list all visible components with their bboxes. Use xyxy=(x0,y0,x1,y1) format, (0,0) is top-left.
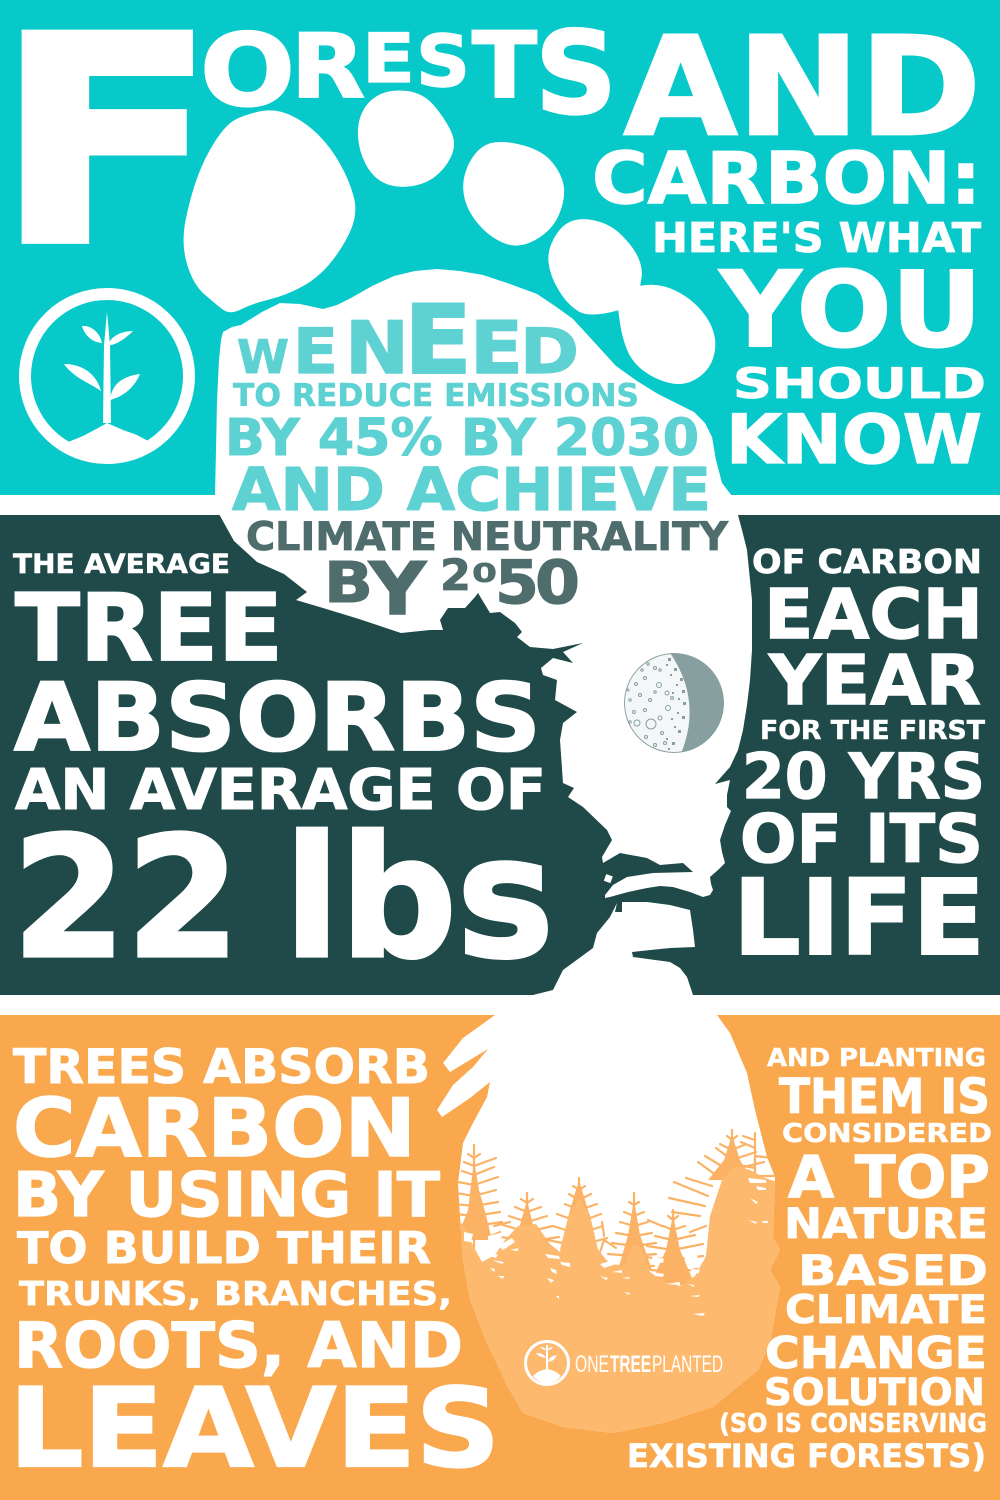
22: 22 xyxy=(12,802,240,996)
footprint: big toe xyxy=(185,111,354,311)
moon: shadow side xyxy=(624,653,724,753)
lbs: lbs xyxy=(284,800,554,996)
to build their: TO BUILD THEIR xyxy=(17,1223,431,1274)
panel: teal header band xyxy=(0,0,1000,495)
carbon: CARBON xyxy=(13,1082,416,1175)
fir tree branches xyxy=(454,1130,777,1285)
the average: THE AVERAGE xyxy=(13,549,230,580)
title: O: O xyxy=(200,12,295,129)
logo wordmark PLANTED: PLANTED xyxy=(652,1351,723,1378)
2: 2 xyxy=(440,551,471,601)
heading: Forests and carbon, here's what you should know xyxy=(0,0,986,480)
logo mound xyxy=(68,423,147,452)
text block: of carbon each year for the first 20 yrs of its life xyxy=(733,542,986,979)
climate: CLIMATE xyxy=(785,1288,987,1333)
D: D xyxy=(520,315,579,388)
leaves: LEAVES xyxy=(9,1365,500,1492)
E: E xyxy=(293,315,338,388)
year: YEAR xyxy=(768,641,981,721)
title: S: S xyxy=(535,7,617,140)
illustration: forest inside the heel xyxy=(458,1128,780,1433)
solution: SOLUTION xyxy=(764,1371,985,1414)
logo leaves xyxy=(64,326,140,400)
footprint: heel in orange band xyxy=(437,1015,780,1433)
W: W xyxy=(237,330,289,384)
title: S: S xyxy=(416,20,470,103)
for the first: FOR THE FIRST xyxy=(760,716,986,746)
logo: One Tree Planted xyxy=(526,1342,723,1384)
title: SHOULD: SHOULD xyxy=(733,359,986,408)
based: BASED xyxy=(798,1246,988,1295)
0: 0 xyxy=(472,559,497,589)
logo wordmark ONE: ONE xyxy=(575,1351,609,1378)
title: HERE'S WHAT: HERE'S WHAT xyxy=(652,214,981,262)
title: YOU: YOU xyxy=(718,249,982,371)
footprint: small knot xyxy=(604,874,613,883)
and planting: AND PLANTING xyxy=(767,1043,986,1072)
white flecks in forest xyxy=(464,1178,768,1316)
footprint: fourth and fifth toes xyxy=(549,220,714,383)
E: E xyxy=(404,286,472,396)
of its: OF ITS xyxy=(740,800,983,878)
title: KNOW: KNOW xyxy=(726,401,982,480)
footprint: heel xyxy=(495,902,717,1015)
nature: NATURE xyxy=(784,1199,988,1248)
to reduce emissions: TO REDUCE EMISSIONS xyxy=(233,378,639,414)
so is conserving: (SO IS CONSERVING xyxy=(719,1409,987,1439)
logo ring xyxy=(526,1342,568,1384)
trunks, branches,: TRUNKS, BRANCHES, xyxy=(19,1274,452,1313)
text block: the average tree absorbs an average of 22 lbs xyxy=(12,549,554,996)
each: EACH xyxy=(764,575,983,655)
absorbs: ABSORBS xyxy=(14,664,541,773)
roots, and: ROOTS, AND xyxy=(14,1309,463,1382)
logo sprout xyxy=(533,1345,561,1383)
change: CHANGE xyxy=(765,1328,987,1379)
logo ring xyxy=(25,294,189,458)
icon: moon xyxy=(624,653,724,753)
text block: and planting them xyxy=(627,1043,992,1475)
footprint: sole, tree-canopy silhouette xyxy=(215,269,752,898)
an average of: AN AVERAGE OF xyxy=(15,758,546,823)
fir tree cores xyxy=(456,1135,752,1285)
moon: lit side with craters xyxy=(624,653,690,753)
logo wordmark TREE: TREE xyxy=(610,1351,651,1378)
them is: THEM IS xyxy=(779,1069,990,1125)
panel: dark green middle band xyxy=(0,515,1000,995)
tree: TREE xyxy=(15,574,283,682)
title: AND: AND xyxy=(624,9,981,167)
5: 5 xyxy=(495,548,539,618)
logo stem xyxy=(103,312,111,423)
0: 0 xyxy=(535,548,580,618)
panel: orange lower band xyxy=(0,1015,1000,1500)
climate neutrality: CLIMATE NEUTRALITY xyxy=(246,515,729,560)
icon: seedling logo xyxy=(25,294,189,470)
text block: we need to reduce emissions xyxy=(225,286,711,524)
B: B xyxy=(324,551,373,616)
forest floor mass xyxy=(460,1166,780,1433)
text block: climate neutrality by 2050 xyxy=(246,515,729,631)
by 45% by 2030: BY 45% BY 2030 xyxy=(225,409,699,468)
title: CARBON:: CARBON: xyxy=(592,137,981,220)
life: LIFE xyxy=(733,857,985,979)
footprint: second toe xyxy=(359,91,453,186)
footprint: third toe xyxy=(464,143,563,245)
moon: craters xyxy=(624,654,724,752)
and achieve: AND ACHIEVE xyxy=(232,456,711,524)
N: N xyxy=(345,306,409,390)
Y: Y xyxy=(368,547,427,631)
title: R: R xyxy=(291,15,365,118)
E: E xyxy=(470,306,523,390)
by using it: BY USING IT xyxy=(13,1159,440,1231)
moon: stippled terminator xyxy=(666,658,686,750)
considered: CONSIDERED xyxy=(782,1119,992,1149)
text block: trees absorb carbon xyxy=(9,1040,500,1492)
20 yrs: 20 YRS xyxy=(742,740,985,813)
title: T: T xyxy=(472,14,537,119)
footprint illustration xyxy=(185,91,780,1433)
of carbon: OF CARBON xyxy=(752,542,982,581)
trees absorb: TREES ABSORB xyxy=(13,1040,430,1095)
a top: A TOP xyxy=(788,1144,990,1211)
title: E: E xyxy=(362,20,415,99)
existing forests: EXISTING FORESTS) xyxy=(627,1437,986,1475)
